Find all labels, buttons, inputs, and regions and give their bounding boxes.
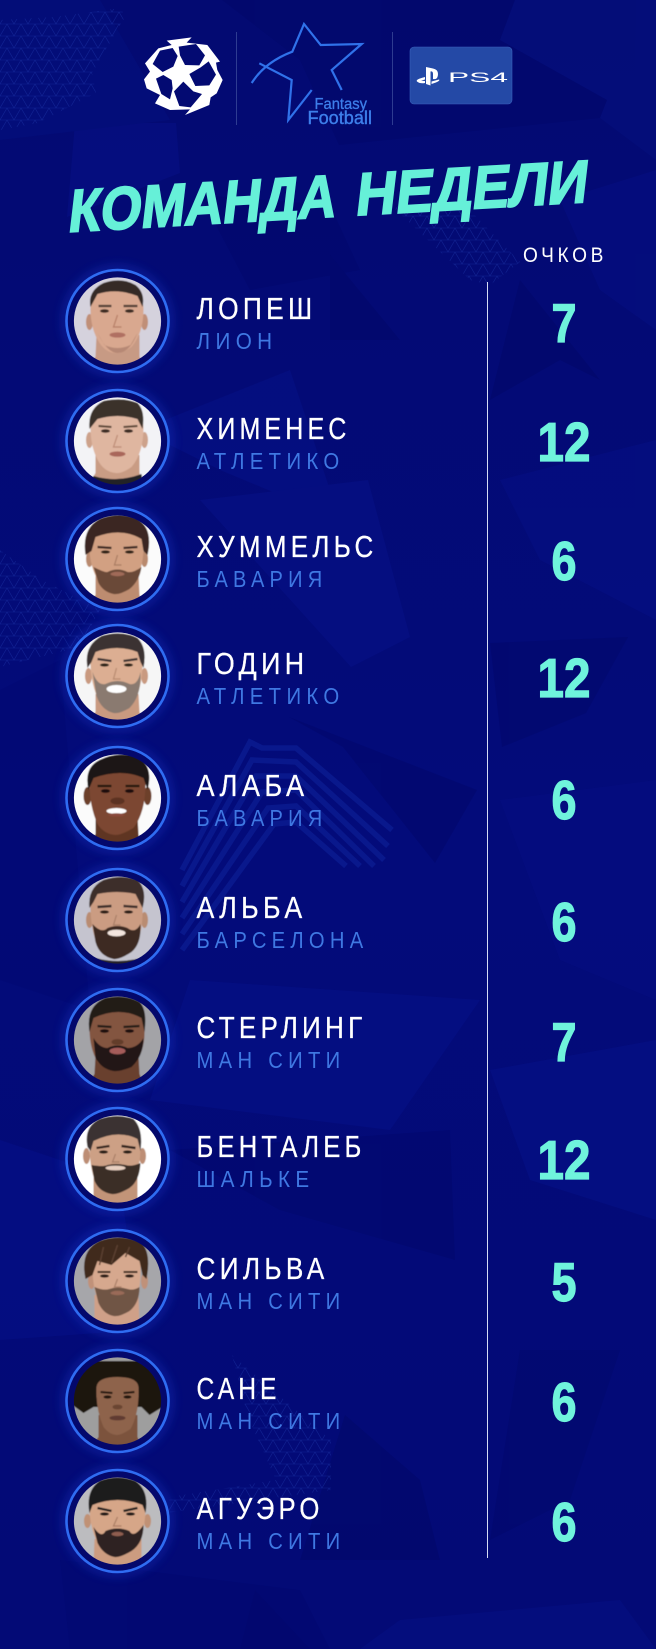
photo: Алаба bbox=[72, 753, 162, 844]
club: Атлетико: АТЛЕТИКО bbox=[196, 683, 344, 709]
score: 6: 6 bbox=[552, 1491, 576, 1553]
club: Лион: ЛИОН bbox=[196, 328, 278, 354]
club: Барселона: БАРСЕЛОНА bbox=[196, 927, 368, 953]
photo: Агуэро bbox=[72, 1476, 162, 1567]
club: Ман Сити: МАН СИТИ bbox=[196, 1528, 346, 1554]
club: Ман Сити: МАН СИТИ bbox=[196, 1408, 346, 1434]
points column heading: ОЧКОВ bbox=[523, 244, 607, 267]
player row: Лопеш bbox=[66, 269, 576, 373]
score: 7: 7 bbox=[552, 292, 576, 354]
logo: Fantasy Football: Football bbox=[308, 107, 372, 128]
name: Бенталеб: БЕНТАЛЕБ bbox=[196, 1130, 366, 1164]
player row: Стерлинг bbox=[66, 988, 576, 1092]
player row: Хименес bbox=[66, 389, 590, 493]
title bbox=[65, 147, 593, 245]
club: Ман Сити: МАН СИТИ bbox=[196, 1288, 346, 1314]
score: 12: 12 bbox=[538, 647, 590, 709]
name: Лопеш: ЛОПЕШ bbox=[196, 292, 316, 326]
club: Шальке: ШАЛЬКЕ bbox=[196, 1166, 314, 1192]
divider bbox=[392, 32, 393, 125]
player row: Хуммельс bbox=[66, 507, 576, 611]
score: 6: 6 bbox=[552, 891, 576, 953]
photo: Хименес bbox=[72, 396, 162, 487]
club: Ман Сити: МАН СИТИ bbox=[196, 1047, 346, 1073]
name: Агуэро: АГУЭРО bbox=[196, 1492, 324, 1526]
name: Годин: ГОДИН bbox=[196, 647, 308, 681]
name: Хименес: ХИМЕНЕС bbox=[196, 412, 350, 446]
player row: Годин bbox=[66, 624, 590, 728]
background chevron stripes bbox=[182, 742, 392, 950]
name: Хуммельс: ХУММЕЛЬС bbox=[196, 530, 378, 564]
photo: Альба bbox=[72, 875, 162, 966]
photo: Сильва bbox=[72, 1236, 162, 1327]
player row: Агуэро bbox=[66, 1469, 576, 1573]
score: 6: 6 bbox=[552, 530, 576, 592]
photo: Бенталеб bbox=[72, 1114, 162, 1205]
name: Сане: САНЕ bbox=[196, 1372, 280, 1406]
score: 6: 6 bbox=[552, 769, 576, 831]
player row: Сильва bbox=[66, 1229, 576, 1333]
logo: Fantasy Football: Fantasy bbox=[314, 96, 367, 113]
name: Сильва: СИЛЬВА bbox=[196, 1252, 328, 1286]
divider bbox=[236, 32, 237, 125]
title: КОМАНДА bbox=[65, 162, 341, 245]
logo: PS4 button bbox=[410, 47, 512, 104]
score: 12: 12 bbox=[538, 411, 590, 473]
background texture patches bbox=[0, 8, 520, 1513]
logo: Champions League ball bbox=[144, 37, 223, 115]
logo: PS4 button: PS4 bbox=[448, 69, 508, 85]
score: 7: 7 bbox=[552, 1011, 576, 1073]
name: Алаба: АЛАБА bbox=[196, 769, 308, 803]
column divider bbox=[487, 282, 488, 1558]
name: Альба: АЛЬБА bbox=[196, 891, 306, 925]
logo: Fantasy Football bbox=[252, 24, 372, 128]
photo: Хуммельс bbox=[72, 514, 162, 605]
club: Бавария: БАВАРИЯ bbox=[196, 805, 328, 831]
photo: Лопеш bbox=[72, 276, 162, 367]
photo: Годин bbox=[72, 631, 162, 722]
name: Стерлинг: СТЕРЛИНГ bbox=[196, 1011, 366, 1045]
photo: Сане bbox=[72, 1356, 162, 1447]
player row: Бенталеб bbox=[66, 1107, 590, 1211]
title: НЕДЕЛИ bbox=[353, 147, 593, 228]
club: Бавария: БАВАРИЯ bbox=[196, 566, 328, 592]
player row: Алаба bbox=[66, 746, 576, 850]
score: 6: 6 bbox=[552, 1371, 576, 1433]
club: Атлетико: АТЛЕТИКО bbox=[196, 448, 344, 474]
player row: Альба bbox=[66, 868, 576, 972]
player row: Сане bbox=[66, 1349, 576, 1453]
score: 12: 12 bbox=[538, 1129, 590, 1191]
photo: Стерлинг bbox=[72, 995, 162, 1086]
score: 5: 5 bbox=[552, 1251, 576, 1313]
